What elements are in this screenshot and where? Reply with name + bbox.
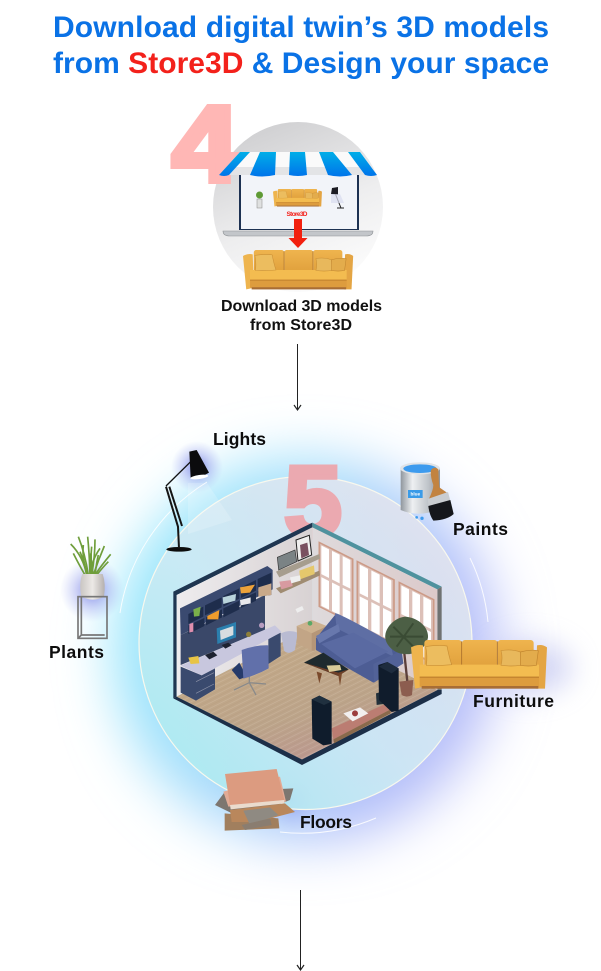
label: paints: Paints <box>453 519 508 539</box>
media console <box>332 690 391 743</box>
outer glow <box>113 458 497 842</box>
tree plant <box>385 617 428 697</box>
step 5: room scene <box>49 429 572 842</box>
item: floor tiles <box>215 769 295 831</box>
item: paint can and brush: blue <box>411 492 421 497</box>
pot <box>80 574 105 600</box>
label: lights: Lights <box>213 429 266 449</box>
isometric room <box>173 523 442 765</box>
side table <box>297 620 327 651</box>
red download arrow <box>288 219 308 248</box>
mini lamp <box>331 187 344 208</box>
yellow sofa <box>243 250 353 289</box>
room shell <box>173 523 442 765</box>
mini plant <box>256 192 263 208</box>
label: plants: Plants <box>49 642 104 662</box>
waste bin <box>281 631 298 653</box>
metal stand <box>78 597 107 638</box>
item: lamp <box>166 450 209 552</box>
title: from Store3D & Design your space <box>53 47 549 80</box>
thin orbit arcs <box>120 482 488 833</box>
number 5: 5 <box>284 446 342 558</box>
office chair <box>232 645 269 695</box>
mini sofa <box>273 189 322 207</box>
caption: download 3D models <box>221 298 382 334</box>
arrow down 2 <box>297 890 304 970</box>
title <box>53 11 549 80</box>
inner circle <box>139 476 472 810</box>
desk <box>181 622 282 701</box>
caption: download 3D models: from Store3D <box>250 317 352 334</box>
wood floor <box>177 627 437 759</box>
title: Download digital twin’s 3D models <box>53 11 549 44</box>
caption: download 3D models: Download 3D models <box>221 298 382 315</box>
grey circle backdrop <box>213 122 383 292</box>
grass blades <box>71 537 111 575</box>
windows <box>319 542 434 664</box>
item: furniture sofa <box>411 640 547 689</box>
label: floors: Floors <box>300 812 352 832</box>
item glow spots <box>60 441 572 832</box>
wall shelves and frames <box>276 535 320 613</box>
awning <box>219 152 377 176</box>
item: paint can and brush <box>400 462 454 521</box>
laptop store screen <box>223 172 373 236</box>
blue couch <box>316 613 403 683</box>
label: furniture: Furniture <box>473 691 554 711</box>
wall cabinet and shelves <box>180 566 273 665</box>
item: plants <box>71 537 111 638</box>
step 4: download from store <box>172 84 383 292</box>
number 4: 4 <box>172 84 240 205</box>
coffee table <box>304 653 349 686</box>
store3D mini label: Store3D <box>286 211 308 218</box>
speakers <box>312 662 399 745</box>
arrow down 1 <box>294 344 301 410</box>
lamp beam <box>188 483 232 534</box>
monitor <box>217 622 236 644</box>
